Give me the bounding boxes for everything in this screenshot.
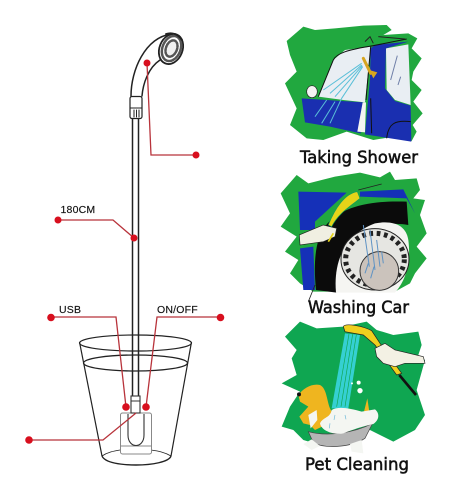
hubcap	[360, 252, 399, 290]
red callout lines	[29, 63, 220, 440]
panel: pet cleaning	[282, 322, 425, 453]
dog	[298, 385, 336, 430]
caption: washing car: Washing Car	[308, 298, 409, 318]
green backdrop	[282, 322, 425, 445]
green backdrop	[281, 172, 427, 292]
label: 180CM: 180CM	[60, 204, 95, 216]
label: ON/OFF: ON/OFF	[157, 304, 198, 316]
water stream	[332, 333, 360, 408]
bubbles	[351, 381, 363, 393]
water spray	[315, 63, 363, 123]
pump	[120, 396, 152, 454]
red callout dots	[25, 60, 224, 444]
shower diagram	[25, 30, 224, 465]
icon: shower head	[130, 30, 187, 118]
label: USB: USB	[59, 304, 81, 316]
green backdrop	[285, 25, 423, 141]
panel: taking shower	[285, 25, 423, 142]
mirror	[307, 86, 317, 98]
bucket of water	[80, 335, 192, 465]
blue car body	[302, 98, 363, 133]
white tyre	[336, 222, 409, 293]
yellow shower handle	[363, 58, 371, 73]
foam	[320, 408, 378, 434]
panel: washing car	[281, 172, 427, 302]
hand with yellow nozzle	[299, 225, 337, 245]
hand	[375, 343, 425, 367]
shower pole	[132, 119, 138, 396]
caption: taking shower: Taking Shower	[299, 148, 418, 168]
blue car body	[298, 192, 347, 230]
tub	[308, 423, 373, 446]
caption: pet cleaning: Pet Cleaning	[305, 455, 409, 475]
black wheel arch	[315, 201, 408, 293]
yellow shower handle	[343, 325, 402, 375]
white window	[318, 47, 371, 102]
